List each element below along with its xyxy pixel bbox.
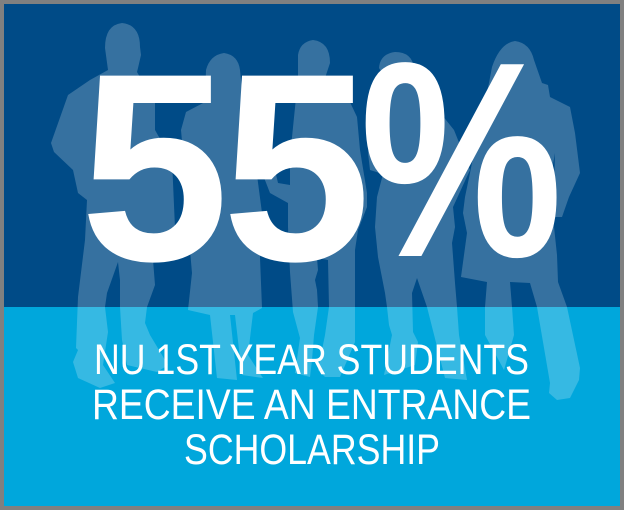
- digit: first 5: 5: [80, 17, 229, 317]
- silhouette: person fourth from left: [368, 52, 470, 380]
- caption line 1: NU 1ST YEAR STUDENTS: [94, 336, 529, 384]
- illustration: student silhouettes: [51, 23, 580, 400]
- panel: dark blue upper background: [4, 4, 620, 307]
- silhouette: man on left: [51, 23, 175, 388]
- silhouette: woman on right: [461, 41, 580, 400]
- caption line 3: SCHOLARSHIP: [184, 426, 440, 474]
- caption text: [92, 336, 531, 474]
- silhouette: person in centre: [263, 40, 367, 377]
- percent sign: %: [360, 4, 563, 315]
- big number: 55%: [80, 4, 563, 317]
- digit: second 5: 5: [222, 17, 371, 317]
- silhouette: woman second from left: [181, 53, 263, 380]
- panel: light blue lower background: [4, 307, 620, 506]
- caption line 2: RECEIVE AN ENTRANCE: [92, 381, 531, 429]
